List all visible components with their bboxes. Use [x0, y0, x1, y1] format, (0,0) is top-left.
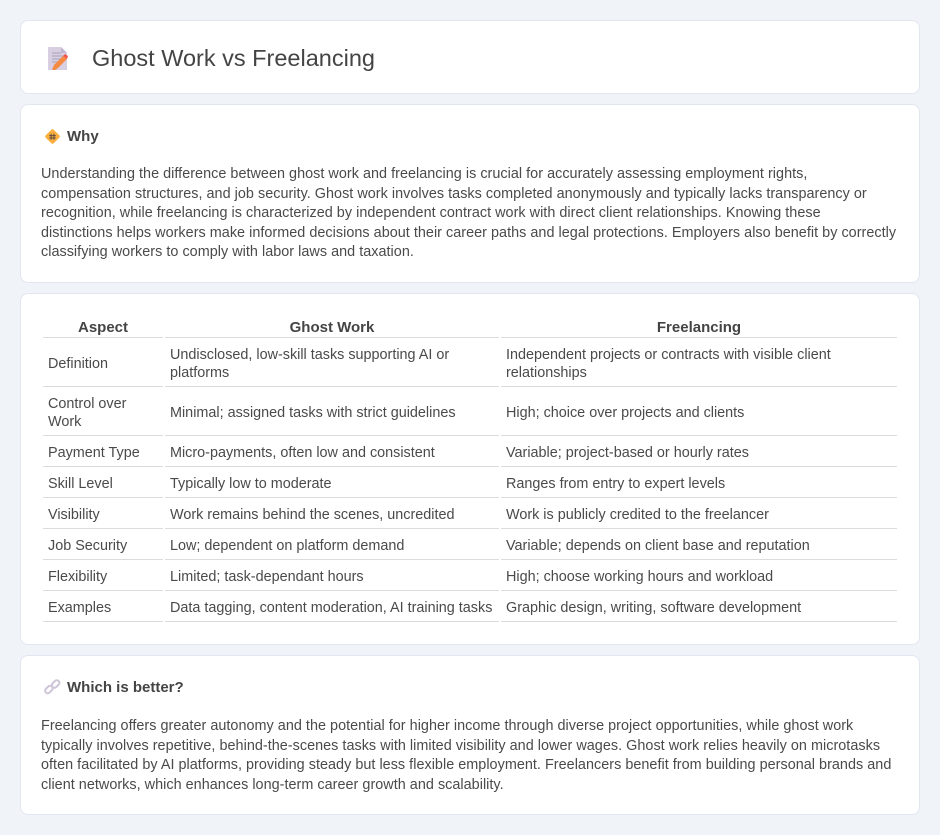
row: definition: Definition: [48, 356, 108, 372]
row: control over work: [48, 396, 126, 430]
visibility: freelancing: Work is publicly credited to the freelancer: [506, 507, 769, 523]
heading: why: Why: [67, 128, 99, 145]
row: control over work: Work: [48, 414, 81, 430]
definition: ghost work: Undisclosed, low-skill tasks supporting AI or: [170, 347, 449, 363]
panel: comparison table: [20, 293, 920, 645]
panel: title header: [20, 20, 920, 94]
row: control over work: Control over: [48, 396, 126, 412]
job security: ghost work: Low; dependent on platform demand: [170, 538, 404, 554]
flexibility: freelancing: High; choose working hours and workload: [506, 569, 773, 585]
definition: ghost work: platforms: [170, 365, 229, 381]
row: flexibility: Flexibility: [48, 569, 107, 585]
control: freelancing: High; choice over projects and clients: [506, 405, 744, 421]
panel: which is better: [20, 655, 920, 815]
job security: freelancing: Variable; depends on client base and reputation: [506, 538, 810, 554]
text block: which is better paragraph: Freelancing offers greater autonomy and the potential for higher income through diverse project opportunities, while ghost work: [41, 718, 853, 734]
icon: document with pencil: [48, 47, 68, 70]
row: examples: Examples: [48, 600, 111, 616]
visibility: ghost work: Work remains behind the scenes, uncredited: [170, 507, 455, 523]
icon: diamond sign: [45, 129, 60, 144]
examples: freelancing: Graphic design, writing, software development: [506, 600, 801, 616]
text block: why paragraph: Understanding the difference between ghost work and freelancing is crucial for accurately assessing employment rights,: [41, 166, 807, 182]
skill: ghost work: Typically low to moderate: [170, 476, 332, 492]
text block: why paragraph: distinctions helps workers make informed decisions about their career paths and legal protections. Employers also benefit by correctly: [41, 225, 896, 241]
row: job security: Job Security: [48, 538, 127, 554]
payment: ghost work: Micro-payments, often low and consistent: [170, 445, 435, 461]
row: visibility: Visibility: [48, 507, 100, 523]
text block: why paragraph: classifying workers to comply with labor laws and taxation.: [41, 244, 414, 260]
definition: ghost work: [170, 347, 449, 381]
text block: which is better paragraph: [41, 718, 891, 793]
heading: which is better: Which is better?: [67, 679, 184, 696]
table header: ghost work: Ghost Work: [290, 319, 374, 336]
flexibility: ghost work: Limited; task-dependant hours: [170, 569, 364, 585]
row: skill level: Skill Level: [48, 476, 113, 492]
text block: which is better paragraph: often facilitated by AI platforms, providing steady but less flexible employment. Freelancers benefit from building personal brands and: [41, 757, 891, 773]
text block: why paragraph: recognition, while freelancing is characterized by independent contract work with direct client relationships. Knowing these: [41, 205, 821, 221]
control: ghost work: Minimal; assigned tasks with strict guidelines: [170, 405, 456, 421]
text block: why paragraph: compensation structures, and job security. Ghost work involves tasks completed anonymously and typically lacks transparency or: [41, 186, 867, 202]
row: payment type: Payment Type: [48, 445, 140, 461]
examples: ghost work: Data tagging, content moderation, AI training tasks: [170, 600, 492, 616]
icon: chain link: [44, 679, 60, 694]
text block: why paragraph: [41, 166, 896, 260]
skill: freelancing: Ranges from entry to expert levels: [506, 476, 725, 492]
text block: which is better paragraph: typically involves repetitive, behind-the-scenes tasks with limited visibility and lower wages. Ghost work relies heavily on microtasks: [41, 738, 880, 754]
table header: freelancing: Freelancing: [657, 319, 741, 336]
text block: which is better paragraph: client networks, which enhances long-term career growth and scalability.: [41, 777, 504, 793]
definition: freelancing: Independent projects or contracts with visible client: [506, 347, 831, 363]
title: Ghost Work vs Freelancing: [92, 45, 375, 71]
definition: freelancing: [506, 347, 831, 381]
payment: freelancing: Variable; project-based or hourly rates: [506, 445, 749, 461]
definition: freelancing: relationships: [506, 365, 587, 381]
table header: aspect: Aspect: [78, 319, 128, 336]
panel: why: [20, 104, 920, 283]
